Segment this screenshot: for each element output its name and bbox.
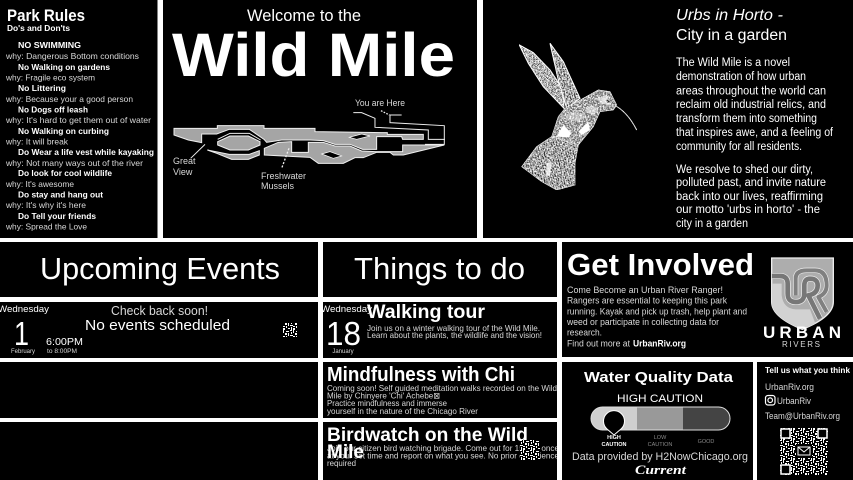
time: [46, 338, 82, 353]
icon: urban rivers logo: [763, 258, 841, 349]
panel: tell us what you think: [757, 362, 853, 480]
rules list: why: Dangerous Bottom conditions: [5, 51, 139, 61]
panel: things to do heading: [323, 242, 557, 297]
rules list: why: Fragile eco system: [5, 72, 95, 82]
panel: birdwatch: [323, 422, 559, 480]
panel: walking tour: [321, 302, 557, 358]
description: [367, 325, 542, 340]
rules list: Do Tell your friends: [18, 211, 96, 221]
icon: small qr code: [283, 323, 297, 337]
heading: birdwatch: Birdwatch on the Wild: [327, 424, 528, 446]
icon: urban rivers logo: RIVERS: [782, 340, 820, 349]
map label: great view: View: [173, 167, 193, 177]
rules list: No Walking on curbing: [18, 126, 109, 136]
map label: freshwater mussels: Freshwater: [261, 171, 306, 181]
heading: mindfulness: Mindfulness with Chi: [327, 364, 515, 386]
date block: [321, 304, 372, 355]
heading: walking tour: Walking tour: [367, 302, 486, 323]
text block: about the wild mile: community for all residents.: [676, 141, 802, 153]
panel: upcoming events heading: Upcoming Events: [40, 251, 280, 286]
subheading: do's and don'ts: Do's and Don'ts: [7, 23, 70, 33]
time: to 8:00PM: [47, 349, 77, 355]
heading: park rules: Park Rules: [7, 6, 85, 25]
rules list: No Dogs off leash: [18, 104, 88, 114]
panel: mindfulness with chi: [323, 362, 557, 418]
text block: about the wild mile: that inspires awe, and a feeling of: [676, 127, 834, 139]
description: Practice mindfulness and immerse: [327, 398, 447, 408]
description: Join our citizen bird watching brigade. Come out for 15 min once: [327, 443, 559, 453]
date block: 1: [14, 315, 29, 352]
rules list: [5, 40, 154, 232]
heading: birdwatch: [328, 427, 527, 458]
heading: birdwatch: Mile: [327, 441, 364, 463]
event message: [86, 306, 229, 330]
rules list: Do stay and hang out: [18, 190, 103, 200]
description: Coming soon! Self guided meditation walks recorded on the Wild: [327, 383, 557, 393]
gauge bar: [591, 407, 730, 435]
panel: about: [483, 0, 853, 238]
icon: urban rivers logo: URBAN: [763, 323, 841, 342]
date block: 18: [326, 315, 361, 352]
text block: about the wild mile: reclaim old industrial relics, and: [676, 99, 826, 111]
rules list: NO SWIMMING: [18, 40, 81, 50]
date block: February: [11, 349, 35, 355]
gauge labels: CAUTION: [648, 442, 672, 448]
icon: instagram: [766, 396, 775, 405]
text block: ranger invitation: research.: [567, 328, 602, 338]
panel: welcome and map: [163, 0, 477, 238]
description: required: [327, 458, 356, 468]
text block: about the wild mile: city in a garden: [676, 218, 748, 230]
gauge labels: [601, 435, 714, 448]
panel: water quality: [562, 362, 753, 480]
description: [327, 445, 557, 468]
text block: about the wild mile: transform them into something: [676, 113, 817, 125]
welcome line: Welcome to the: [247, 7, 361, 25]
icon: qr code: [520, 440, 540, 460]
description: [327, 383, 557, 416]
rules list: Do look for cool wildlife: [18, 168, 112, 178]
text block: about the wild mile: [676, 57, 834, 230]
gauge labels: LOW: [654, 435, 667, 441]
text block: about the wild mile: We resolve to shed our dirty,: [676, 164, 813, 176]
text block: ranger invitation: weed or participate in collecting data for: [566, 317, 719, 327]
date block: Wednesday: [321, 304, 372, 315]
text block: about the wild mile: areas throughout the world can: [676, 86, 826, 98]
description: yourself in the nature of the Chicago River: [327, 406, 478, 416]
rules list: why: It's awesome: [5, 179, 74, 189]
panel: upcoming events heading: [0, 242, 318, 297]
rules list: No Littering: [18, 83, 66, 93]
panel: event row no events: [0, 302, 318, 358]
event message: Check back soon!: [111, 304, 208, 318]
map of the wild mile: [174, 111, 445, 168]
text block: about the wild mile: polluted past, and invite nature: [676, 177, 826, 189]
heading: urbs in horto: City in a garden: [676, 27, 787, 44]
text block: ranger invitation: Come Become an Urban River Ranger!: [567, 285, 723, 295]
text block: about the wild mile: demonstration of how urban: [676, 71, 806, 83]
title: wild mile: Wild Mile: [172, 21, 455, 89]
rules list: why: Spread the Love: [5, 222, 87, 232]
description: Learn about the plants, the wildlife and the vision!: [367, 330, 542, 340]
description: at your set time and report on what you see. No prior experience: [327, 450, 559, 460]
text block: ranger invitation: Rangers are essential to keeping this park: [567, 296, 727, 306]
panel: things to do heading: Things to do: [354, 251, 525, 286]
data credit: Data provided by H2NowChicago.org: [572, 451, 748, 463]
text block: ranger invitation: [566, 285, 747, 348]
heading: water quality data: Water Quality Data: [584, 370, 734, 386]
current logo: Current: [635, 462, 686, 477]
text block: about the wild mile: back into our lives, reaffirming: [676, 191, 823, 203]
map label: great view: Great: [173, 156, 196, 166]
heading: urbs in horto: [676, 7, 787, 44]
rules list: why: Because your a good person: [5, 94, 133, 104]
event message: No events scheduled: [85, 318, 230, 334]
instagram handle: UrbanRiv: [777, 396, 811, 406]
panel: event row empty lower: [0, 422, 318, 480]
time: 6:00PM: [46, 336, 83, 348]
heading: get involved: Get Involved: [567, 247, 754, 282]
rules list: Do Wear a life vest while kayaking: [18, 147, 154, 157]
icon: qr code with envelope: [780, 428, 828, 475]
gauge labels: HIGH: [607, 435, 621, 441]
text block: ranger invitation: UrbanRiv.org: [633, 338, 686, 348]
date block: January: [332, 349, 354, 355]
rules list: why: It's hard to get them out of water: [5, 115, 151, 125]
map label: freshwater mussels: Mussels: [261, 181, 295, 191]
description: Mile by Chinyere 'Chi' Achebe⊠: [327, 390, 440, 400]
description: Join us on a winter walking tour of the Wild Mile.: [367, 323, 540, 333]
rules list: why: It will break: [5, 136, 69, 146]
gauge labels: CAUTION: [601, 442, 627, 448]
status: high caution: HIGH CAUTION: [617, 393, 703, 405]
heading: urbs in horto: Urbs in Horto -: [676, 7, 783, 24]
text block: ranger invitation: Find out more at: [567, 338, 630, 348]
email: Team@UrbanRiv.org: [765, 411, 840, 421]
heading: Tell us what you think: [765, 365, 850, 375]
date block: [0, 304, 49, 355]
panel: get involved: [562, 242, 853, 357]
text block: ranger invitation: running. Kayak and pick up trash, help plant and: [567, 306, 747, 316]
rules list: why: Not many ways out of the river: [5, 158, 143, 168]
text block: about the wild mile: our motto 'urbs in horto' - the: [676, 204, 820, 216]
panel: event row empty: [0, 362, 318, 418]
icon: hummingbird illustration: [519, 43, 637, 190]
gauge labels: GOOD: [698, 439, 714, 445]
rules list: why: It's why it's here: [5, 200, 86, 210]
map label: you are here: You are Here: [355, 98, 405, 108]
rules list: No Walking on gardens: [18, 62, 110, 72]
website: UrbanRiv.org: [765, 382, 814, 392]
panel: park rules: [0, 0, 158, 238]
text block: about the wild mile: The Wild Mile is a novel: [676, 57, 790, 69]
